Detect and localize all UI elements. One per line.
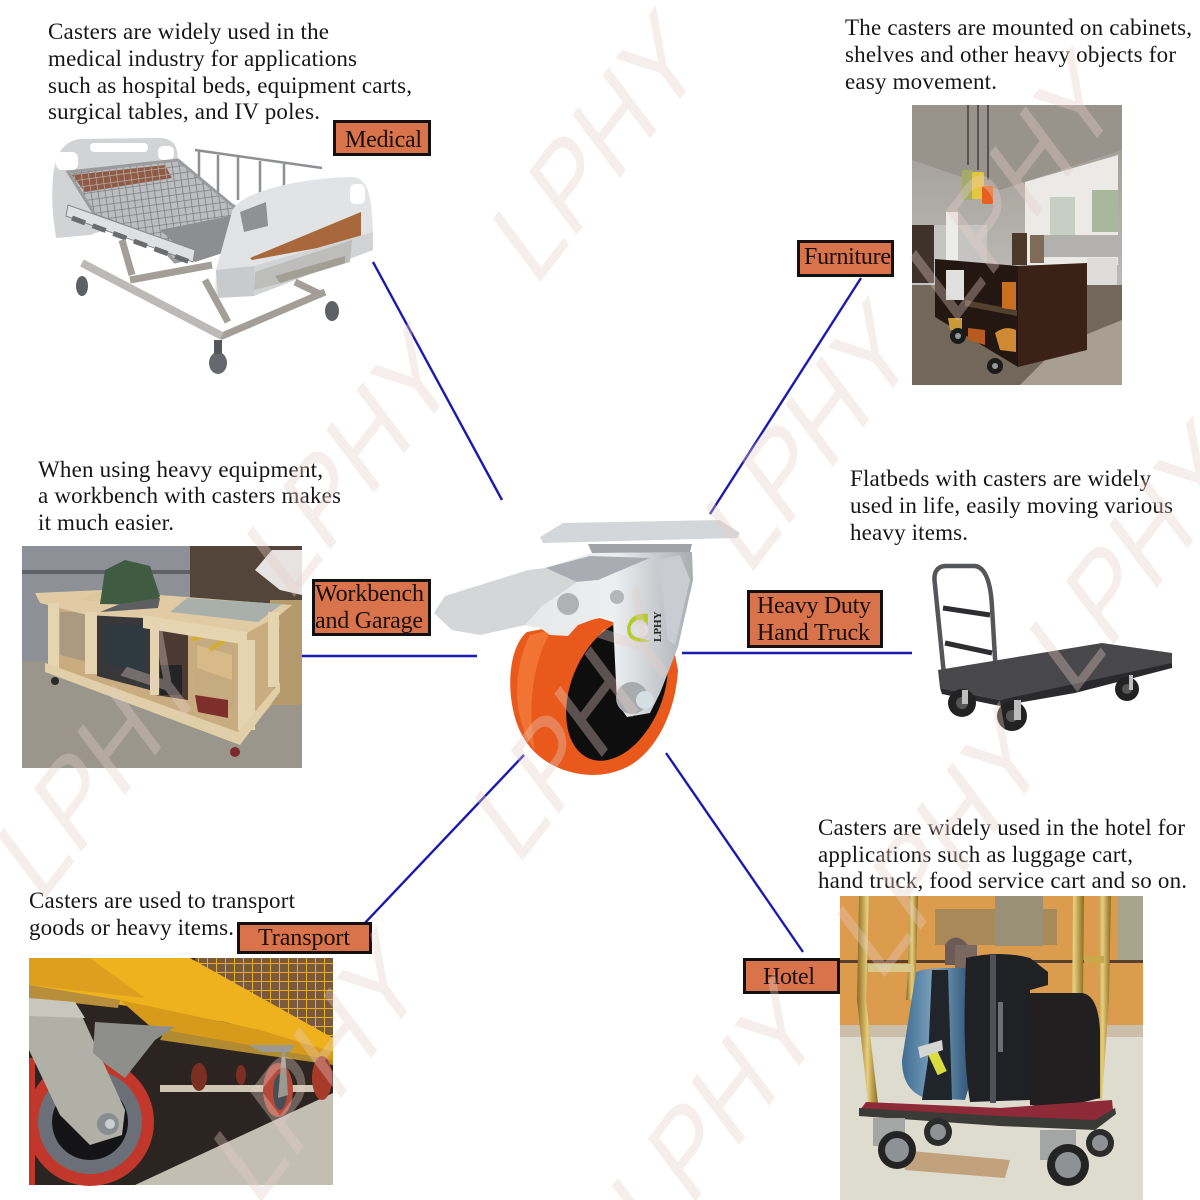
text: transport description: goods or heavy items. xyxy=(29,915,234,940)
text: furniture description: easy movement. xyxy=(845,69,997,94)
frame xyxy=(82,240,325,336)
text: workbench description: When using heavy equipment, xyxy=(38,457,323,482)
mattress mesh xyxy=(68,160,262,262)
text: medical description: Casters are widely used in the xyxy=(48,19,329,44)
fork xyxy=(29,1013,125,1145)
label: Heavy Duty Hand Truck: Hand Truck xyxy=(757,620,870,646)
label: Transport: Transport xyxy=(258,925,350,951)
text: furniture description: The casters are mounted on cabinets, xyxy=(845,15,1192,40)
text: medical description: medical industry for applications xyxy=(48,46,357,71)
label: Transport xyxy=(238,924,370,952)
label: Hotel xyxy=(744,960,838,992)
text: heavy duty description: Flatbeds with casters are widely xyxy=(850,466,1152,491)
panel: workbench photo xyxy=(22,546,302,768)
text: hotel description: hand truck, food service cart and so on. xyxy=(818,868,1187,893)
label: Workbench and Garage: and Garage xyxy=(315,608,423,634)
text: heavy duty description: heavy items. xyxy=(850,520,968,545)
near foot board xyxy=(215,177,373,297)
miter saw xyxy=(100,560,160,605)
text: medical description: such as hospital beds, equipment carts, xyxy=(48,73,412,98)
connector lines xyxy=(302,262,912,952)
text: hotel description: applications such as luggage cart, xyxy=(818,842,1133,867)
trolley platform xyxy=(860,1100,1113,1122)
label: Heavy Duty Hand Truck xyxy=(748,592,882,646)
text: heavy duty description: used in life, easily moving various xyxy=(850,493,1173,518)
mounting plate xyxy=(540,520,740,543)
guests xyxy=(945,938,975,965)
text: transport description: Casters are used to transport xyxy=(29,888,296,913)
far side rail xyxy=(195,150,322,208)
text: hotel description: Casters are widely used in the hotel for xyxy=(818,815,1185,840)
text: workbench description: it much easier. xyxy=(38,510,174,535)
watermark layer: LPHY xyxy=(454,562,702,888)
label: Workbench and Garage: Workbench xyxy=(315,581,424,607)
far headboard xyxy=(52,138,178,238)
logo xyxy=(627,611,664,642)
bench interior xyxy=(50,605,280,740)
text: hotel description xyxy=(818,815,1187,893)
text: workbench description xyxy=(38,457,341,535)
big wheel xyxy=(26,1058,154,1186)
watermark layer: LPHY xyxy=(226,298,474,624)
text: medical description: surgical tables, and IV poles. xyxy=(48,99,320,124)
suitcases xyxy=(902,968,968,1100)
label: Hotel: Hotel xyxy=(763,964,815,990)
trolley wheels xyxy=(873,1118,905,1146)
label: Workbench and Garage xyxy=(314,580,430,634)
swivel xyxy=(588,544,692,556)
label: Medical xyxy=(334,122,430,154)
watermark layer: LPHY xyxy=(816,678,1064,1004)
central caster product xyxy=(434,520,740,776)
watermark layer: LPHY xyxy=(889,22,1137,348)
label: Furniture: Furniture xyxy=(804,244,891,270)
panel: transport photo xyxy=(0,958,333,1190)
text: furniture description: shelves and other heavy objects for xyxy=(845,42,1176,67)
label: Heavy Duty Hand Truck: Heavy Duty xyxy=(757,593,871,619)
far wheels xyxy=(191,1063,207,1091)
panel: furniture photo xyxy=(912,105,1122,385)
near side rail xyxy=(66,205,195,262)
watermark layer: LPHY xyxy=(685,272,933,598)
text: workbench description: a workbench with casters makes xyxy=(38,483,341,508)
axle bolt xyxy=(616,682,648,714)
logo: LPHY xyxy=(652,611,664,642)
bench top xyxy=(35,590,292,633)
poles xyxy=(857,896,878,1103)
fork and brake xyxy=(434,552,693,717)
panel: hotel photo xyxy=(840,896,1143,1200)
panel: heavy duty truck photo xyxy=(934,566,1172,731)
text: medical description xyxy=(48,19,412,124)
label: Medical: Medical xyxy=(345,127,422,153)
legs and bottom shelf xyxy=(48,603,59,669)
wheel xyxy=(510,618,678,775)
text: transport description xyxy=(29,888,296,940)
text: heavy duty description xyxy=(850,466,1173,545)
panel: medical photo xyxy=(52,138,373,374)
text: furniture description xyxy=(845,15,1192,94)
